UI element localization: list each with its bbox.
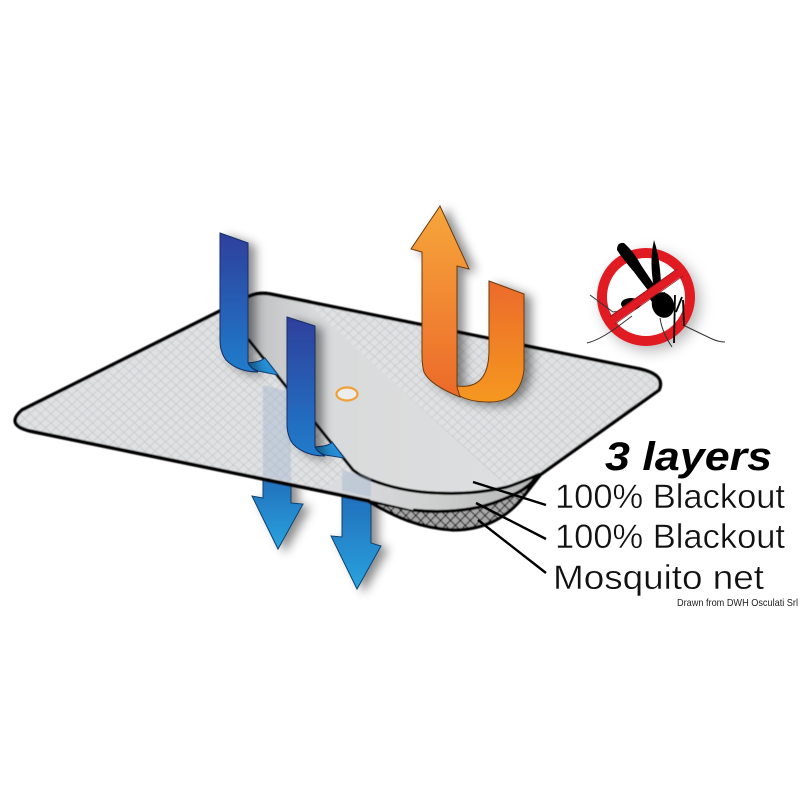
- arrow: orange U-turn arrow: [411, 206, 524, 402]
- slash: [612, 272, 680, 320]
- label: second blackout: 100% Blackout: [555, 518, 786, 556]
- marker: orange eyelet: [336, 388, 358, 400]
- leader line: first blackout layer: [473, 482, 546, 505]
- mesh sheet: [15, 293, 660, 511]
- panel: layered sheet: [15, 293, 660, 530]
- pale strips where the airflow passes: [263, 385, 291, 482]
- fold edge: [248, 339, 540, 493]
- heading: 3 layers: 3 layers: [605, 435, 772, 479]
- arrow: right blue ribbon: [287, 317, 344, 458]
- leader line: second blackout layer: [476, 503, 546, 539]
- label: mosquito net: Mosquito net: [553, 559, 765, 597]
- net layer: [370, 474, 541, 530]
- arrow: lower blue arrow left: [252, 470, 303, 549]
- icon: no mosquito sign: [587, 240, 725, 347]
- label: first blackout: 100% Blackout: [555, 478, 786, 516]
- folded top layer: [248, 293, 507, 493]
- arrow: left blue ribbon: [220, 233, 278, 375]
- ring: [602, 253, 690, 341]
- mosquito: [617, 240, 678, 321]
- leader line: mosquito net: [478, 520, 546, 573]
- middle layer band: [322, 470, 536, 511]
- arrow: lower blue arrow right: [331, 485, 381, 589]
